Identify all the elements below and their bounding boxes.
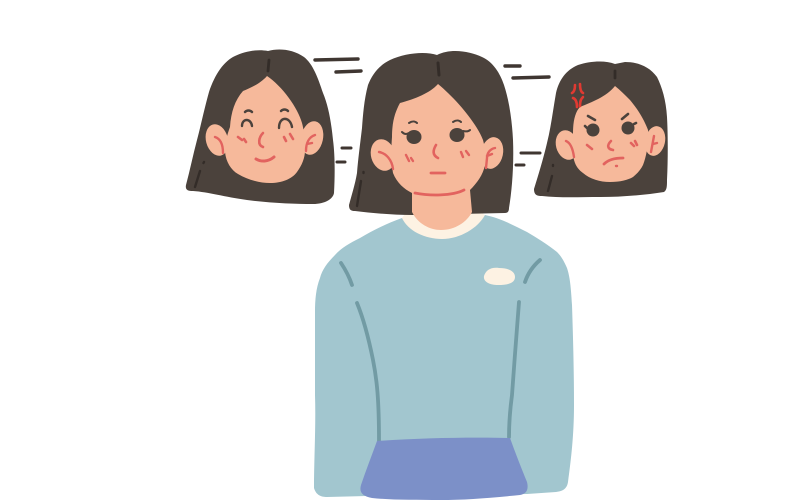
nose [259, 133, 263, 147]
right ear [298, 119, 326, 157]
sweater collar [402, 205, 485, 239]
ear detail [215, 135, 315, 153]
chin line [415, 190, 464, 195]
motion lines: left head top [315, 59, 361, 72]
head: angry right [534, 61, 668, 197]
left ear [552, 128, 582, 162]
left ear [202, 122, 232, 158]
eyes [406, 130, 422, 144]
hair strand [357, 172, 364, 206]
cheeks [406, 151, 469, 161]
frown [604, 158, 623, 164]
ear detail [566, 136, 657, 157]
right ear [642, 124, 668, 158]
closed eyes [242, 110, 292, 128]
badge patch [484, 268, 515, 285]
cheeks [238, 134, 293, 142]
sleeve and side seams [341, 260, 540, 441]
hair part [614, 71, 616, 78]
ear detail [379, 148, 495, 169]
face [225, 76, 305, 183]
angry brows and lashes [585, 114, 636, 128]
nose [434, 145, 438, 158]
smile [256, 157, 274, 161]
eyes [586, 124, 600, 136]
motion lines: center top right [505, 66, 549, 78]
motion lines: between left and center [337, 148, 351, 162]
hair strand [548, 165, 553, 191]
cheeks [587, 141, 637, 149]
hair [186, 49, 335, 204]
sweater body [314, 215, 574, 497]
right ear [478, 135, 506, 171]
left ear [367, 136, 399, 174]
face and neck [391, 84, 485, 230]
hair part [438, 63, 439, 75]
chin dot [616, 165, 617, 167]
hair [349, 51, 513, 215]
figure: sweater and skirt [314, 205, 574, 500]
mouth [431, 172, 445, 174]
lashes and brows [402, 120, 470, 134]
hair strand [195, 162, 204, 187]
head: happy left [186, 49, 335, 204]
hair part [268, 60, 269, 71]
face [572, 86, 648, 182]
hair [534, 61, 668, 197]
nose [608, 141, 613, 150]
motion lines: center lower right [516, 153, 540, 165]
motion lines [315, 59, 549, 165]
head: center neutral [349, 51, 513, 230]
anger mark [572, 84, 583, 107]
skirt pocket [360, 438, 528, 500]
